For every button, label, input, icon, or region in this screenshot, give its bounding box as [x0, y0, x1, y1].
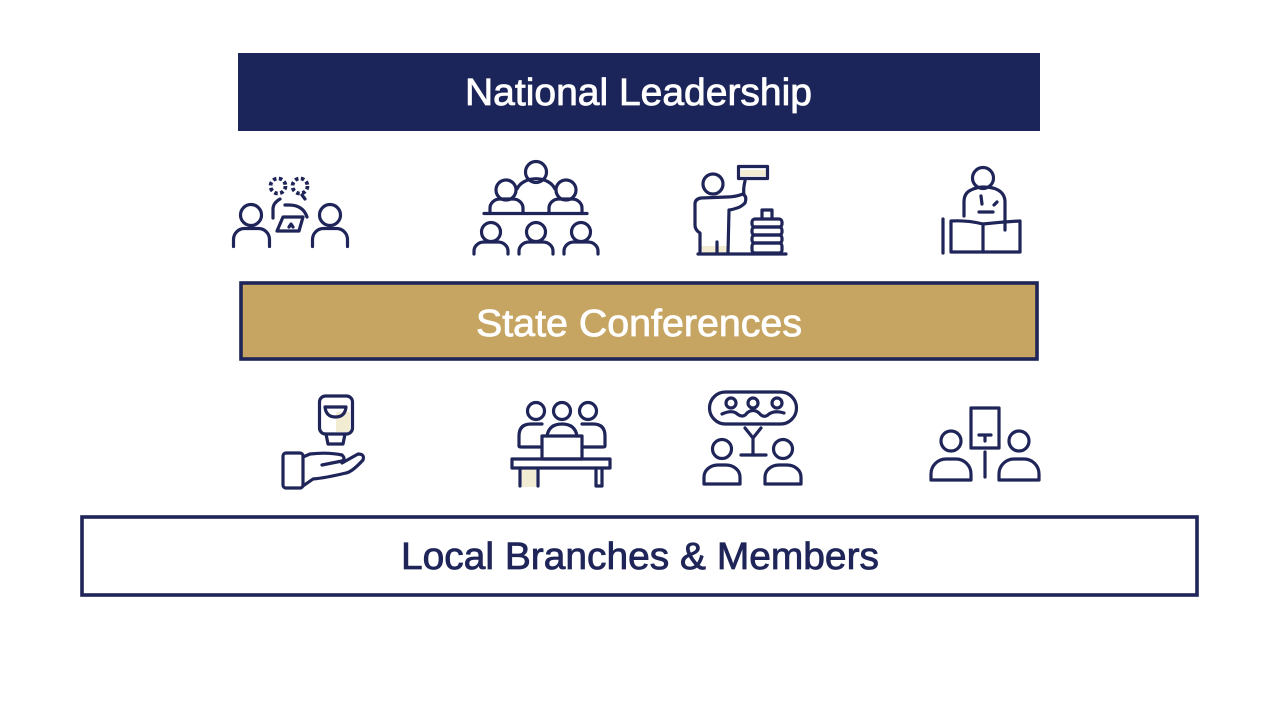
heading: Local Branches & Members: Local Branches & Members — [401, 536, 879, 578]
heading: National Leadership: National Leadership — [465, 72, 812, 114]
icon: lecturer at an open book lectern — [943, 168, 1020, 253]
heading: State Conferences: State Conferences — [476, 303, 802, 345]
tier bar: Local Branches & Members — [82, 517, 1197, 595]
icon: team collaborating around a tablet with gears — [234, 178, 348, 246]
icon: hand receiving from a sanitizer dispenser — [283, 396, 363, 488]
icon: three people at a table with a laptop — [512, 402, 610, 487]
icon: speaker holding a sign beside a stack of books — [695, 166, 786, 254]
tier bar: State Conferences — [241, 283, 1037, 359]
tier bar: National Leadership — [238, 53, 1040, 131]
icon: panel seated above an audience — [474, 162, 598, 254]
icon: two people beside a presentation board — [931, 408, 1039, 480]
icon: two people sharing a speech bubble of a group — [704, 392, 801, 484]
